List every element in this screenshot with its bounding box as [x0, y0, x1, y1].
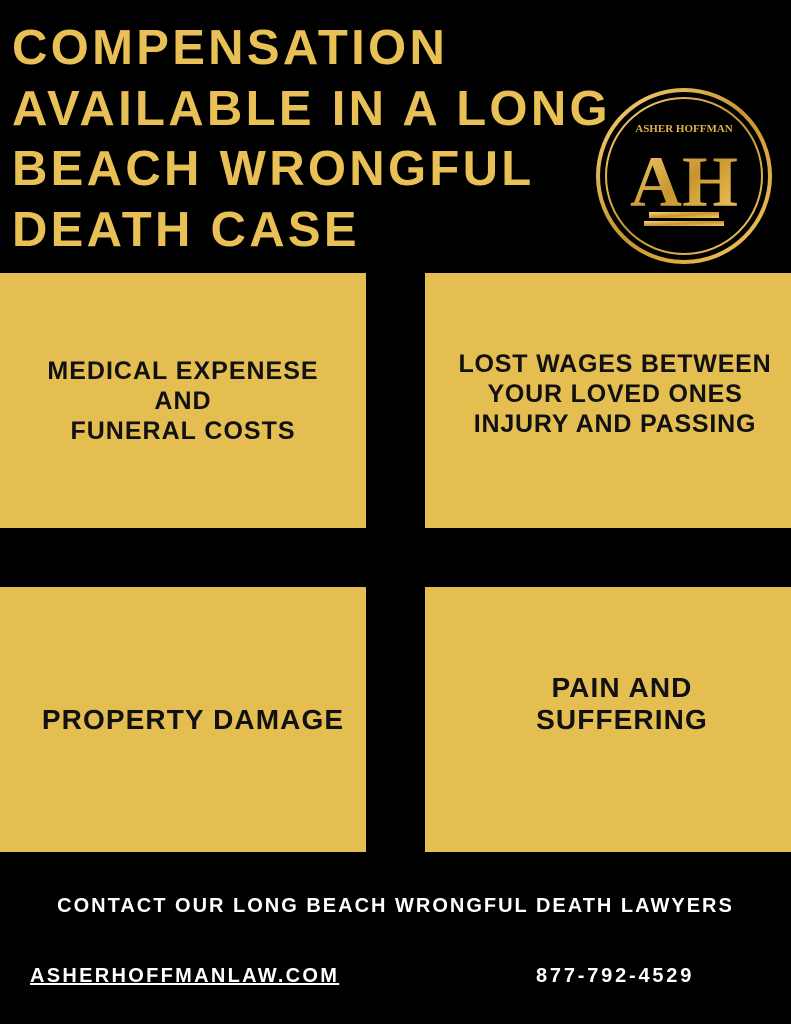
- box: medical: [0, 273, 366, 528]
- box: medical: MEDICAL EXPENESE: [47, 356, 319, 384]
- box: pain: [425, 587, 791, 852]
- box: property: PROPERTY DAMAGE: [42, 704, 344, 734]
- website: ASHERHOFFMANLAW.COM: [30, 965, 339, 987]
- box: lost wages: INJURY AND PASSING: [474, 410, 756, 438]
- logo: AH: [630, 142, 738, 222]
- logo: ASHER HOFFMAN: [635, 123, 733, 135]
- contact heading: CONTACT OUR LONG BEACH WRONGFUL DEATH LAWYERS: [57, 895, 734, 917]
- phone: 877-792-4529: [536, 965, 694, 987]
- title: [12, 21, 611, 256]
- title: BEACH WRONGFUL: [12, 142, 535, 196]
- title: COMPENSATION: [12, 21, 448, 75]
- box: property: [0, 587, 366, 852]
- box: pain: PAIN AND: [551, 672, 693, 703]
- box: lost wages: LOST WAGES BETWEEN: [458, 350, 772, 378]
- box: pain: SUFFERING: [536, 704, 708, 735]
- title: DEATH CASE: [12, 202, 360, 256]
- box: medical: AND: [154, 386, 212, 414]
- title: AVAILABLE IN A LONG: [12, 82, 611, 136]
- box: lost wages: YOUR LOVED ONES: [487, 380, 743, 408]
- box: medical: FUNERAL COSTS: [70, 416, 296, 444]
- box: lost wages: [425, 273, 791, 528]
- logo: [596, 88, 772, 264]
